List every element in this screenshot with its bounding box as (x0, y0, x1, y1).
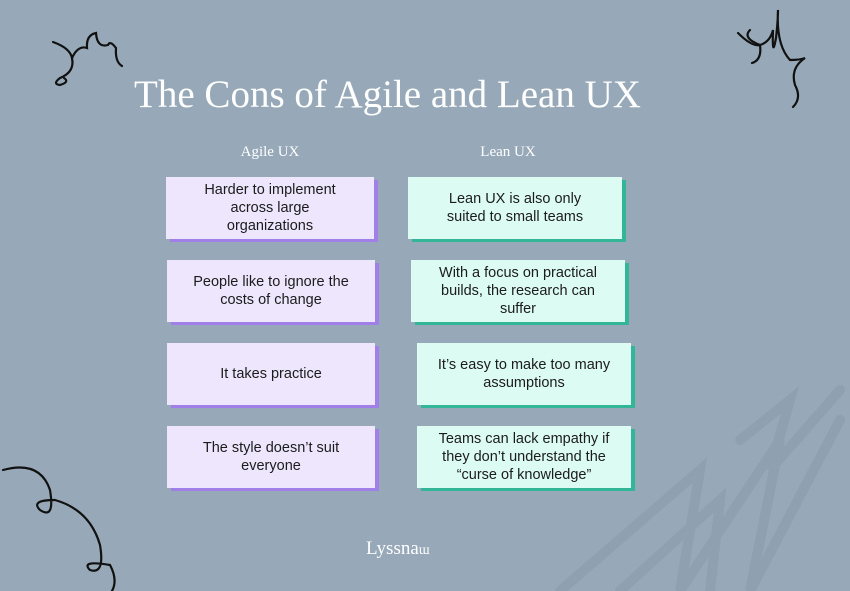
card: lean 3: It’s easy to make too many assumptions (438, 357, 610, 391)
logo: Lyssnaɯ (366, 538, 430, 559)
card: lean 4: Teams can lack empathy if they don’t understand the “curse of knowledge” (439, 431, 609, 483)
title: The Cons of Agile and Lean UX (134, 73, 641, 116)
card: agile 4 (167, 426, 375, 488)
card: agile 2 (167, 260, 375, 322)
card: agile 1 (166, 177, 374, 239)
card: agile 1: Harder to implement across large organizations (204, 182, 336, 234)
heading: Agile UX: Agile UX (241, 144, 299, 160)
card: lean 4 (417, 426, 631, 488)
card: lean 1: Lean UX is also only suited to small teams (447, 191, 583, 225)
card: lean 3 (417, 343, 631, 405)
card: agile 3 (167, 343, 375, 405)
card: lean 2 (411, 260, 625, 322)
heading: Lean UX: Lean UX (480, 144, 536, 160)
card: lean 2: With a focus on practical builds, the research can suffer (439, 265, 597, 317)
card: agile 4: The style doesn’t suit everyone (203, 440, 339, 474)
card: lean 1 (408, 177, 622, 239)
card: agile 3: It takes practice (220, 366, 322, 382)
card: agile 2: People like to ignore the costs of change (193, 274, 349, 308)
